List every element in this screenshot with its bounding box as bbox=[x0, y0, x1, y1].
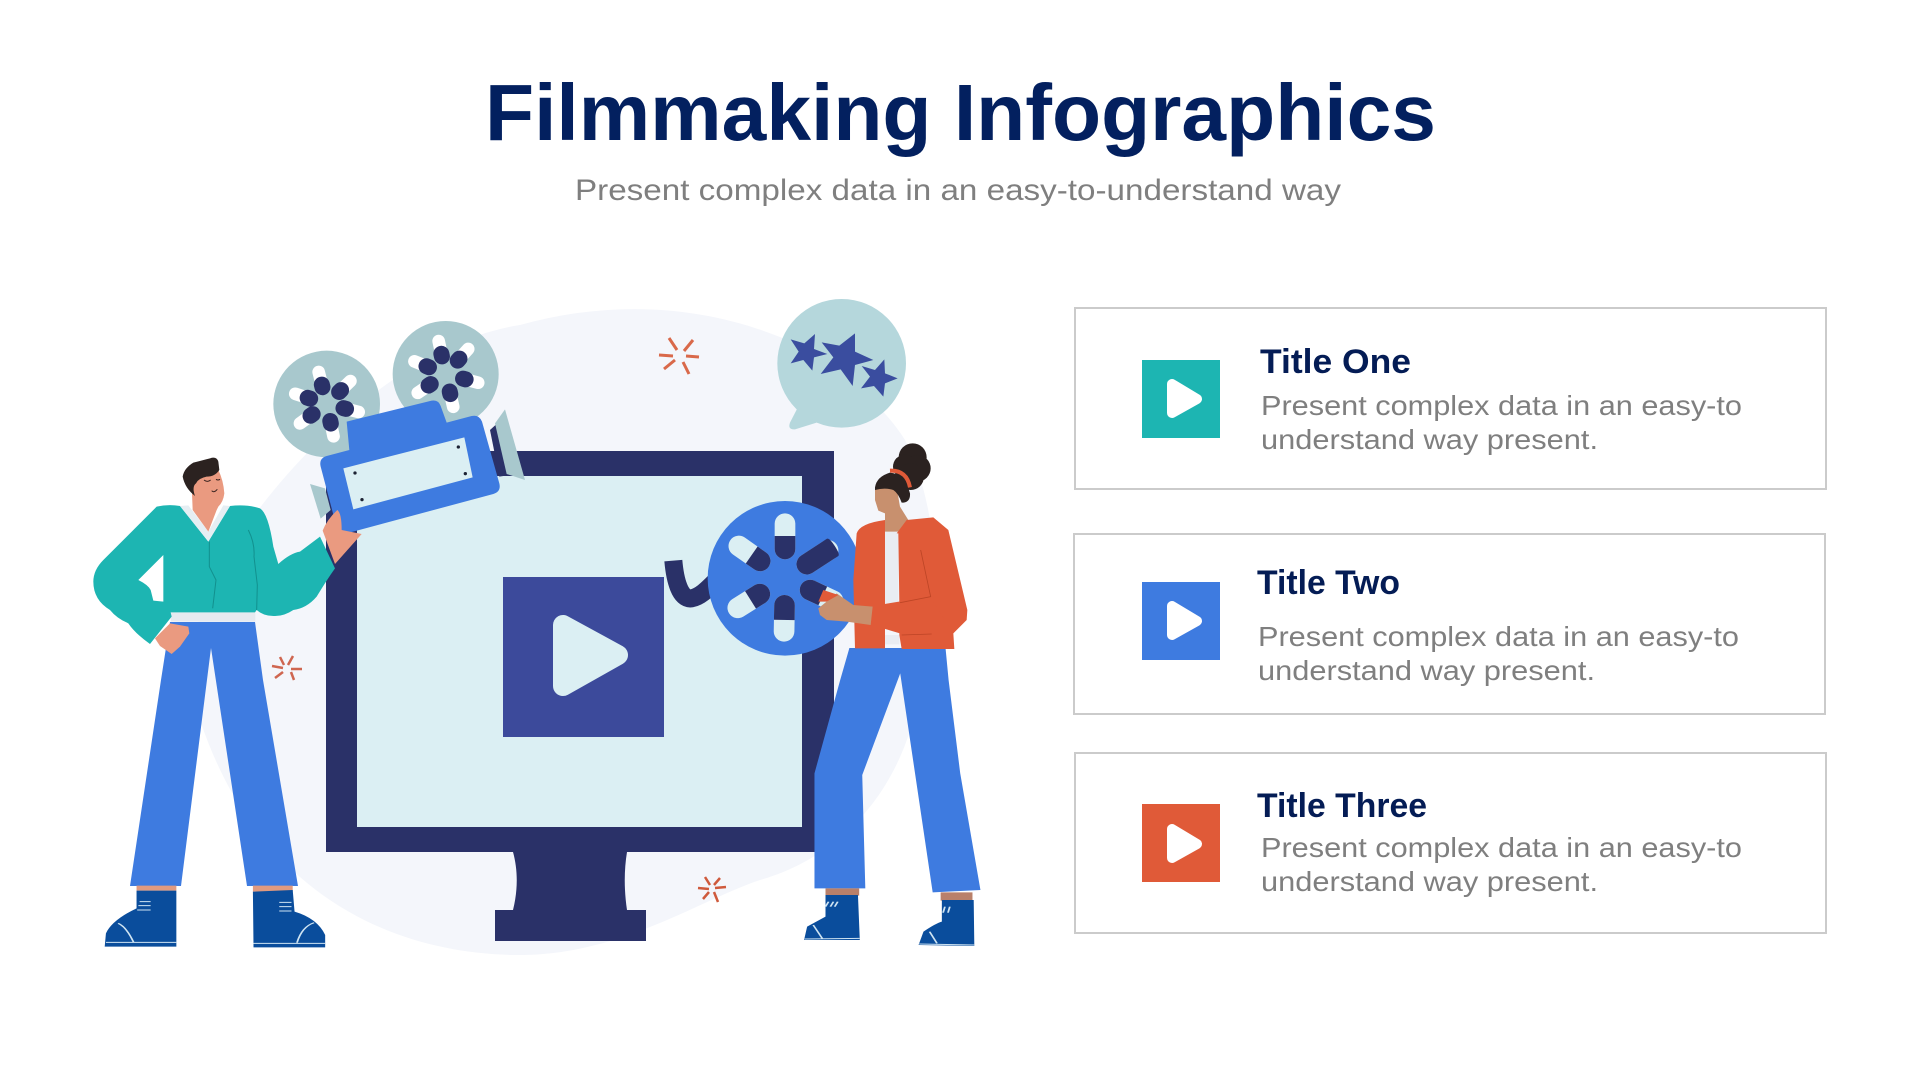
card: title three bbox=[1075, 753, 1826, 933]
man neck and face bbox=[192, 470, 224, 532]
icon: film reel with strip bbox=[673, 501, 862, 656]
man collar bbox=[180, 505, 230, 542]
film reel: left bbox=[273, 351, 380, 457]
woman shoes bbox=[804, 895, 860, 940]
card body: Present complex data in an easy-to bbox=[1258, 621, 1739, 652]
woman headband bbox=[890, 471, 910, 487]
man hip hand bbox=[155, 623, 189, 654]
camera body bbox=[320, 400, 500, 534]
icon: play blue bbox=[1142, 582, 1220, 660]
man hair bbox=[183, 458, 219, 496]
character: man bbox=[93, 458, 362, 947]
man raised hand bbox=[323, 510, 362, 564]
icon: film camera bbox=[273, 321, 525, 534]
man facial features bbox=[204, 479, 220, 492]
speech bubble with stars bbox=[777, 299, 906, 429]
icon: play teal bbox=[1142, 360, 1220, 438]
title: Filmmaking Infographics bbox=[485, 68, 1436, 157]
man trousers bbox=[130, 622, 298, 886]
film strip curl bbox=[673, 561, 715, 598]
man sweater bbox=[93, 505, 335, 644]
card heading: Title One bbox=[1260, 343, 1411, 381]
illustration: filmmaking scene bbox=[93, 299, 980, 955]
stars bbox=[791, 333, 898, 397]
woman jacket bbox=[853, 517, 967, 649]
card body: Present complex data in an easy-to bbox=[1261, 390, 1742, 421]
sparkle: bottom bbox=[698, 877, 726, 902]
card body: Present complex data in an easy-to bbox=[1261, 832, 1742, 863]
sparkle: top bbox=[659, 338, 699, 374]
card body bbox=[1261, 390, 1742, 455]
card: title two bbox=[1074, 534, 1825, 714]
film reel: right bbox=[393, 321, 499, 427]
man belt bbox=[171, 612, 255, 622]
woman hair bbox=[875, 443, 931, 503]
card heading: Title Three bbox=[1257, 787, 1427, 825]
woman ankles bbox=[826, 888, 972, 901]
woman trousers bbox=[814, 648, 980, 892]
icon: play orange bbox=[1142, 804, 1220, 882]
icon: monitor play button bbox=[503, 577, 664, 737]
card body: understand way present. bbox=[1261, 424, 1598, 455]
sweater seams bbox=[209, 530, 257, 610]
woman neck and face bbox=[875, 487, 908, 533]
card body bbox=[1258, 621, 1739, 686]
woman shirt bbox=[882, 532, 899, 644]
camera panel bbox=[343, 437, 473, 509]
sparkle: left bbox=[272, 656, 302, 680]
reel disc and spokes bbox=[708, 501, 862, 656]
card body: understand way present. bbox=[1258, 655, 1595, 686]
subtitle: Present complex data in an easy-to-understand way bbox=[575, 174, 1341, 207]
card heading: Title Two bbox=[1257, 564, 1400, 602]
card body bbox=[1261, 832, 1742, 897]
card body: understand way present. bbox=[1261, 866, 1598, 897]
woman hand bbox=[818, 593, 873, 625]
man shoes bbox=[105, 886, 325, 947]
background blob bbox=[194, 309, 935, 955]
monitor bbox=[326, 451, 834, 941]
camera lens bbox=[310, 409, 525, 519]
card: title one bbox=[1075, 308, 1826, 489]
character: woman bbox=[804, 443, 980, 946]
